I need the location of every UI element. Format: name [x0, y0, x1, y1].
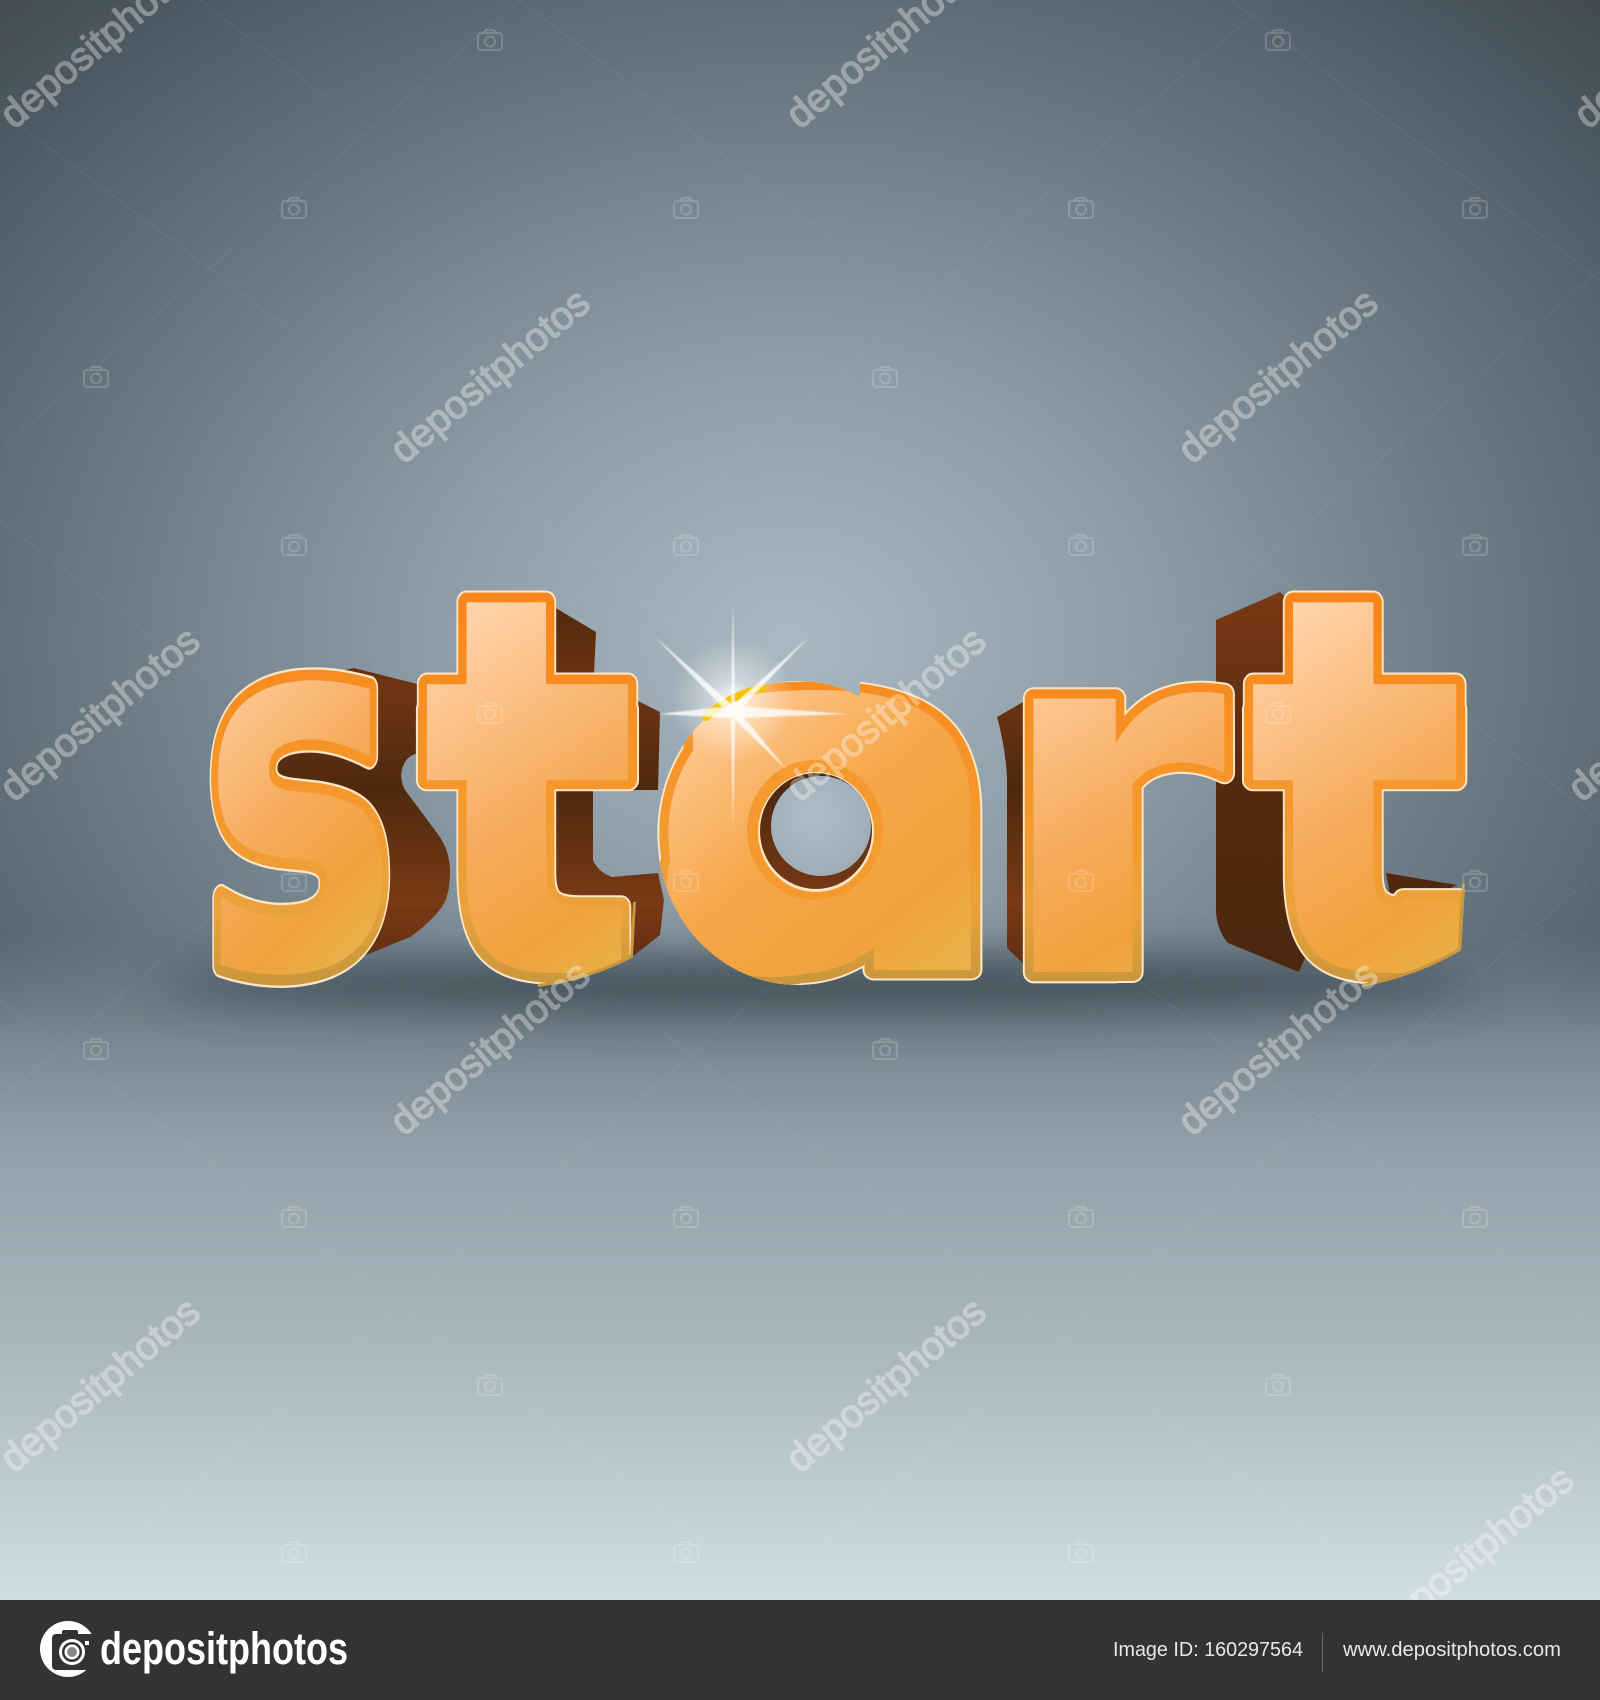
- logo wordmark: depositphotos: [100, 1623, 348, 1674]
- letter s: side wall: [265, 668, 450, 960]
- letter t: front face: t: [421, 484, 639, 1098]
- watermark text repeats: depositphotos: [778, 618, 994, 810]
- watermark camera icons: [84, 30, 1487, 1562]
- letter t: front face: [416, 590, 640, 987]
- letter a: front face: a: [643, 506, 1014, 1088]
- watermark text repeats: depositphotos: [382, 952, 598, 1144]
- letter r: front face: r: [994, 509, 1229, 1091]
- second letter t: side wall: [1216, 592, 1457, 972]
- letter t: front face: t: [421, 484, 639, 1098]
- letter r: front face: r: [994, 509, 1229, 1091]
- watermark text repeats: depositphotos: [1170, 280, 1386, 472]
- letter t (last): front face: t: [1247, 483, 1467, 1098]
- letter s: front face: s: [201, 484, 397, 1098]
- ground shadow under the word: [160, 957, 1480, 1013]
- letter t (last): front face: [1242, 590, 1468, 987]
- letter a: counter hole: [747, 760, 883, 900]
- watermark text repeats: depositphotos: [778, 1289, 994, 1481]
- footer bar: [0, 1600, 1600, 1700]
- letter r: front face: r: [994, 509, 1229, 1091]
- letter s: front face: s: [201, 484, 397, 1098]
- watermark text repeats: depositphotos: [1366, 1457, 1582, 1649]
- letter r: side wall: [997, 698, 1176, 975]
- letter a: front face: a: [643, 506, 1014, 1088]
- background: floor: [0, 930, 1600, 1600]
- letter a: front face: [657, 681, 982, 985]
- watermark text repeats: depositphotos: [1170, 952, 1386, 1144]
- letter t: side wall: [550, 607, 664, 957]
- letter s: front face: s: [201, 484, 397, 1098]
- letter t: front face: t: [421, 484, 639, 1098]
- website url: www.depositphotos.com: [1342, 1639, 1561, 1661]
- image id: Image ID: 160297564: [1113, 1639, 1303, 1661]
- letter t (last): front face: t: [1247, 483, 1467, 1098]
- letter t (last): front face: t: [1247, 483, 1467, 1098]
- 3D word: start: [201, 483, 1467, 1098]
- watermark text repeats: depositphotos: [382, 280, 598, 472]
- letter a: front face: a: [643, 506, 1014, 1088]
- sparkle on letter a: [655, 603, 848, 827]
- icon: depositphotos camera logo: [40, 1621, 96, 1677]
